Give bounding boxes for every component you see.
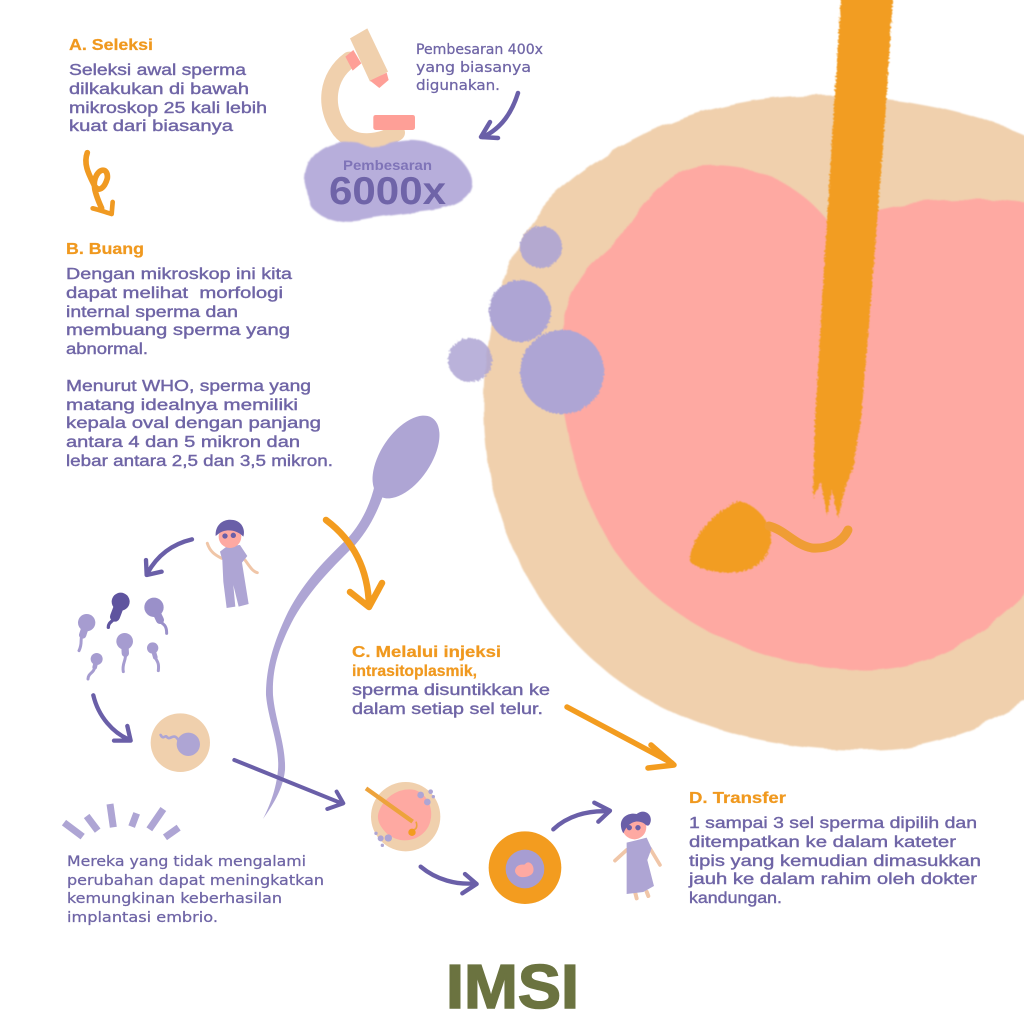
icon: orange squiggle arrow — [86, 153, 113, 214]
text C: dalam setiap sel telur. — [352, 701, 543, 718]
text D — [688, 815, 981, 907]
section C: injection — [352, 644, 550, 718]
note: outcome text — [67, 854, 324, 926]
note: 400x magnification: Pembesaran 400x — [416, 42, 543, 58]
arrow: to woman — [553, 803, 610, 829]
text B: dapat melihat morfologi — [66, 285, 283, 302]
text A: mikroskop 25 kali lebih — [69, 100, 267, 117]
text B: Menurut WHO, sperma yang — [66, 378, 311, 395]
section D: Transfer — [688, 790, 981, 907]
note: outcome text: Mereka yang tidak mengalami — [67, 854, 306, 870]
title: IMSI: IMSI — [446, 953, 579, 1022]
mini egg with pipette — [366, 782, 440, 851]
text D: 1 sampai 3 sel sperma dipilih dan — [689, 815, 977, 832]
text B: kepala oval dengan panjang — [66, 415, 321, 432]
injection pipette — [813, 0, 893, 518]
arrow: to embryo — [421, 867, 477, 893]
note: outcome text: perubahan dapat meningkatkan — [67, 873, 324, 889]
text D: ditempatkan ke dalam kateter — [689, 834, 957, 851]
figure: woman — [615, 812, 660, 898]
note: 400x magnification — [416, 42, 543, 94]
microscope pink parts — [345, 50, 415, 130]
text D: tipis yang kemudian dimasukkan — [689, 853, 981, 870]
illustration: large egg cell — [448, 0, 1024, 750]
text B — [66, 266, 333, 470]
illustration: large sperm — [263, 404, 453, 819]
heading C: intrasitoplasmik, — [352, 663, 477, 680]
label Pembesaran: Pembesaran — [343, 157, 432, 173]
text B: matang idealnya memiliki — [66, 397, 298, 414]
arrow: sperm to egg — [93, 695, 131, 741]
orange sperm — [690, 501, 848, 573]
illustration: bottom process — [366, 782, 660, 904]
figure: man — [207, 520, 257, 608]
text C — [352, 682, 550, 718]
microscope tube — [350, 28, 388, 82]
note: 400x magnification: digunakan. — [416, 78, 500, 94]
heading B: B. Buang — [66, 241, 144, 258]
text A — [69, 62, 267, 135]
heading A: A. Seleksi — [69, 37, 153, 54]
arrow: man to sperm — [146, 539, 192, 575]
heading C — [352, 644, 501, 680]
value 6000x: 6000x — [329, 170, 446, 213]
text B: abnormal. — [66, 341, 148, 358]
illustration: left process cycle — [64, 520, 343, 837]
microscope arm — [330, 60, 397, 142]
text A: kuat dari biasanya — [69, 118, 233, 135]
section A: Seleksi — [69, 37, 267, 135]
section B: Buang — [66, 241, 333, 470]
text A: Seleksi awal sperma — [69, 62, 246, 79]
egg outer layer — [484, 95, 1024, 750]
text A: dilkakukan di bawah — [69, 81, 249, 98]
text D: kandungan. — [689, 890, 782, 907]
egg pink nucleus — [559, 165, 1024, 670]
heading D: D. Transfer — [689, 790, 786, 807]
text B: Dengan mikroskop ini kita — [66, 266, 292, 283]
lilac blob — [305, 140, 473, 222]
arrow: to injection step — [234, 760, 343, 809]
note: outcome text: kemungkinan keberhasilan — [67, 891, 282, 907]
callout: 6000x magnification — [305, 140, 473, 222]
text B: antara 4 dan 5 mikron dan — [66, 434, 300, 451]
illustration: microscope — [330, 28, 415, 142]
text C: sperma disuntikkan ke — [352, 682, 550, 699]
arrow: orange toward transfer — [567, 707, 674, 768]
sperm group — [78, 593, 167, 679]
embryo target — [489, 831, 561, 904]
text B: internal sperma dan — [66, 304, 238, 321]
text B: lebar antara 2,5 dan 3,5 mikron. — [66, 453, 333, 470]
text B: membuang sperma yang — [66, 322, 290, 339]
small egg with sperm — [151, 713, 210, 772]
heading C: C. Melalui injeksi — [352, 644, 501, 661]
arrow: note to microscope — [481, 93, 518, 138]
text D: jauh ke dalam rahim oleh dokter — [688, 871, 978, 888]
note: 400x magnification: yang biasanya — [416, 60, 531, 76]
note: outcome text: implantasi embrio. — [67, 910, 218, 926]
arrow: orange down to C — [326, 520, 382, 607]
polar body cluster — [448, 226, 604, 414]
burst lines — [64, 804, 179, 837]
